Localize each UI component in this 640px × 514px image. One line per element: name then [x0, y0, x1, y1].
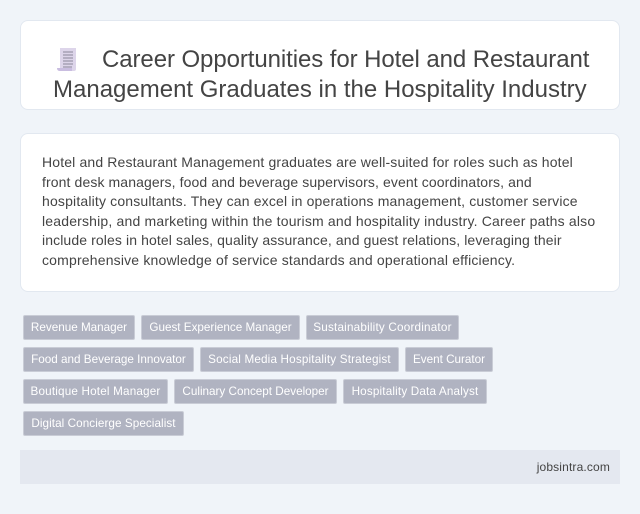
- tag: Food and Beverage Innovator: [23, 347, 194, 372]
- title: Management Graduates in the Hospitality Industry: [53, 76, 587, 103]
- tag: Digital Concierge Specialist: [23, 411, 184, 436]
- tag: Guest Experience Manager: [141, 315, 300, 340]
- description text: Hotel and Restaurant Management graduates are well-suited for roles such as hotel: [42, 154, 573, 170]
- tag: Sustainability Coordinator: [306, 315, 459, 340]
- tag: Event Curator: [405, 347, 493, 372]
- tag: Boutique Hotel Manager: Boutique Hotel Manager: [30, 385, 160, 398]
- tag: Hospitality Data Analyst: Hospitality Data Analyst: [352, 385, 478, 398]
- title: [53, 46, 590, 103]
- tag: Culinary Concept Developer: Culinary Concept Developer: [182, 385, 329, 398]
- description text: include roles in hotel sales, quality assurance, and guest relations, leveraging their: [42, 232, 562, 248]
- description text: leadership, and marketing within the tourism and hospitality industry. Career paths also: [42, 212, 595, 228]
- description text: [42, 154, 595, 268]
- tag: Boutique Hotel Manager: [23, 379, 168, 404]
- title: Career Opportunities for Hotel and Restaurant: [102, 46, 589, 73]
- tag: Social Media Hospitality Strategist: [200, 347, 399, 372]
- footer bar: [20, 450, 620, 484]
- tag: Culinary Concept Developer: [174, 379, 337, 404]
- description text: comprehensive knowledge of service standards and operational efficiency.: [42, 252, 515, 268]
- description text: front desk managers, food and beverage supervisors, event coordinators, and: [42, 174, 532, 190]
- tag: Digital Concierge Specialist: Digital Concierge Specialist: [31, 417, 176, 430]
- description text: hospitality consultants. They can excel in operations management, customer service: [42, 193, 578, 209]
- footer source text: jobsintra.com: [537, 460, 610, 474]
- tag: Event Curator: Event Curator: [413, 353, 485, 366]
- icon: document receipt: [57, 48, 76, 71]
- tag: Food and Beverage Innovator: Food and Beverage Innovator: [31, 353, 186, 366]
- tag: Social Media Hospitality Strategist: Social Media Hospitality Strategist: [208, 353, 391, 366]
- panel: title card: [20, 20, 620, 110]
- job role tags: [23, 315, 493, 436]
- tag: Hospitality Data Analyst: [343, 379, 487, 404]
- tag: Revenue Manager: Revenue Manager: [31, 321, 127, 334]
- tag: Guest Experience Manager: Guest Experience Manager: [149, 321, 292, 334]
- panel: description: [20, 133, 620, 292]
- tag: Sustainability Coordinator: Sustainability Coordinator: [313, 321, 452, 334]
- tag: Revenue Manager: [23, 315, 135, 340]
